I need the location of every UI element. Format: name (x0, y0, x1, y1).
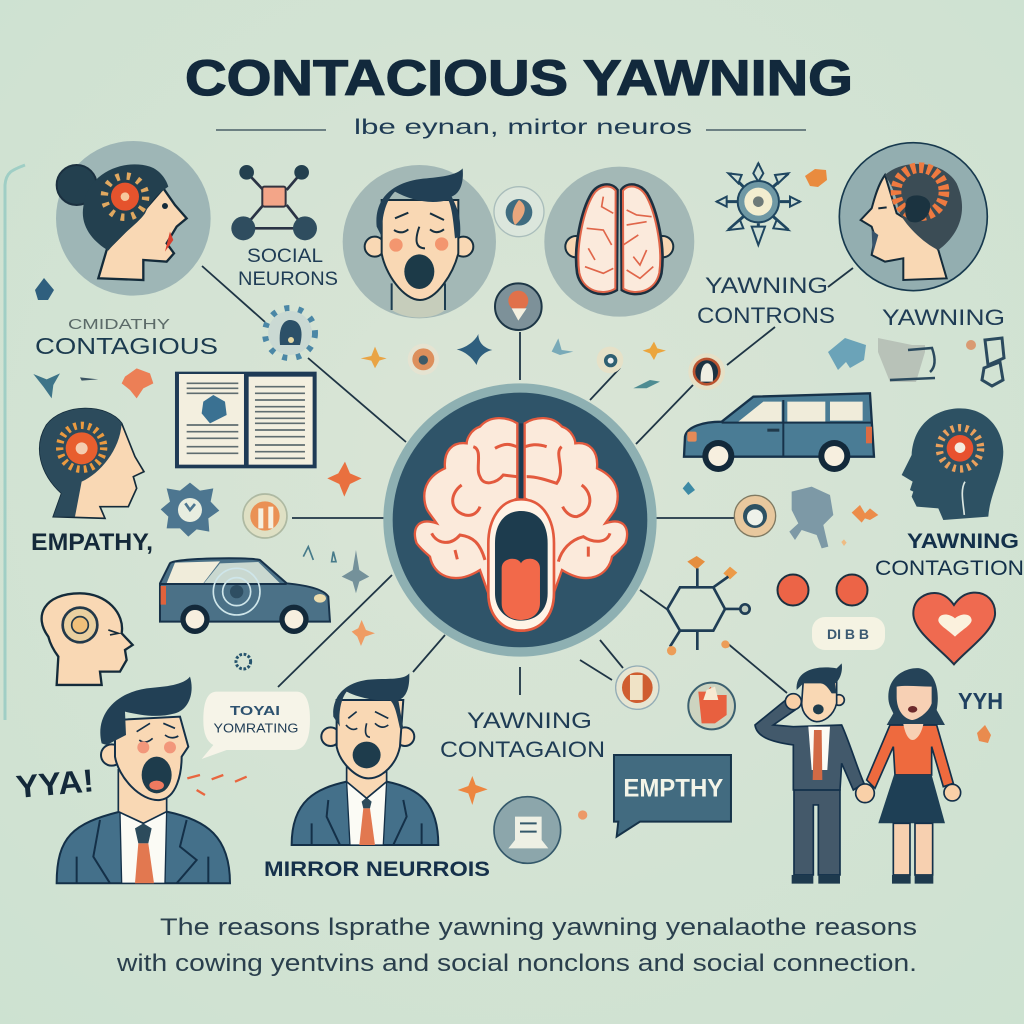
icon: van (684, 393, 874, 472)
label: contagious: CONTAGIOUS (35, 333, 218, 359)
icon: social network (231, 165, 317, 240)
title: CONTACIOUS YAWNING (185, 50, 853, 106)
icon: woman yawning circle top right (839, 143, 987, 291)
accent crosses bottom (458, 776, 587, 820)
label: yawning contagtion right: CONTAGTION (875, 557, 1024, 580)
icon: brain circle top (544, 167, 694, 317)
label: yawning contagaion (440, 708, 605, 762)
icon: node left (243, 494, 287, 538)
footer text: The reasons lsprathe yawning yawning yenalaothe reasons (160, 914, 917, 941)
icon: woman yawning circle top left (56, 141, 211, 296)
label: social neurons: SOCIAL (247, 246, 323, 267)
label: empathy: EMPATHY, (31, 529, 153, 556)
small nodes bottom (616, 640, 735, 729)
icon: hexagon network (667, 568, 750, 650)
icon: small node top center (494, 187, 544, 237)
figure: couple (755, 663, 961, 884)
icon: gear left (161, 483, 219, 537)
label: yawning controns (697, 273, 835, 328)
icon: orange splash top right (805, 169, 827, 187)
callout: yawning speech bubble: TOYAI (230, 704, 280, 718)
label: social neurons: NEURONS (238, 269, 338, 290)
icon: blob right (789, 487, 833, 548)
central brain yawning (383, 383, 657, 657)
label: yawning contagaion: YAWNING (467, 708, 592, 733)
icon: node right (734, 495, 776, 537)
speech bubble small (812, 617, 885, 650)
callout: yawning speech bubble (202, 692, 310, 759)
label: social neurons (238, 246, 338, 290)
connector lines (202, 266, 853, 695)
accent star (977, 725, 991, 743)
icon: heart (913, 593, 995, 664)
icon: bottom centre node (494, 797, 561, 863)
label: mirror neurons: MIRROR NEURROIS (264, 858, 490, 881)
icon: yawning man circle (343, 165, 496, 318)
label: yawning controns: CONTRONS (697, 303, 835, 328)
scattered accents top (361, 334, 666, 388)
speech bubble small: DI B B (827, 626, 869, 642)
icon: open book (175, 372, 317, 468)
callout: yawning speech bubble: YOMRATING (213, 722, 298, 736)
label: yyh: YYH (958, 688, 1003, 714)
footer text (116, 914, 917, 977)
icon: small diamond left (35, 278, 54, 300)
icon: red dots (778, 574, 868, 606)
label: contagious: CMIDATHY (68, 316, 170, 333)
label: contagious (35, 316, 218, 359)
label: yawning contagaion: CONTAGAION (440, 737, 605, 762)
icon: speech node (495, 283, 542, 330)
icon: small gear left (265, 308, 315, 358)
label: yya: YYA! (14, 762, 95, 805)
scattered accents left (33, 368, 375, 669)
label: yawning right: YAWNING (882, 305, 1005, 330)
callout: empthy (614, 755, 731, 837)
icon: car left (159, 558, 330, 634)
icon: gear top right (717, 163, 800, 245)
icon: head left empathy (40, 409, 144, 518)
figure: yawning man left (57, 677, 247, 883)
callout: empthy: EMPTHY (623, 775, 724, 803)
label: yawning contagtion right (875, 530, 1024, 580)
icon: head outline left (42, 593, 133, 685)
icon: head right (902, 408, 1003, 520)
figure: yawning man center (292, 673, 438, 845)
accents right (683, 482, 878, 579)
subtitle: lbe eynan, mirtor neuros (354, 116, 692, 139)
footer text: with cowing yentvins and social nonclons and social connection. (116, 950, 917, 977)
label: yawning contagtion right: YAWNING (907, 530, 1019, 553)
label: yawning controns: YAWNING (705, 273, 828, 298)
icon: node window top right (688, 353, 725, 390)
scattered icons right (828, 338, 1004, 386)
